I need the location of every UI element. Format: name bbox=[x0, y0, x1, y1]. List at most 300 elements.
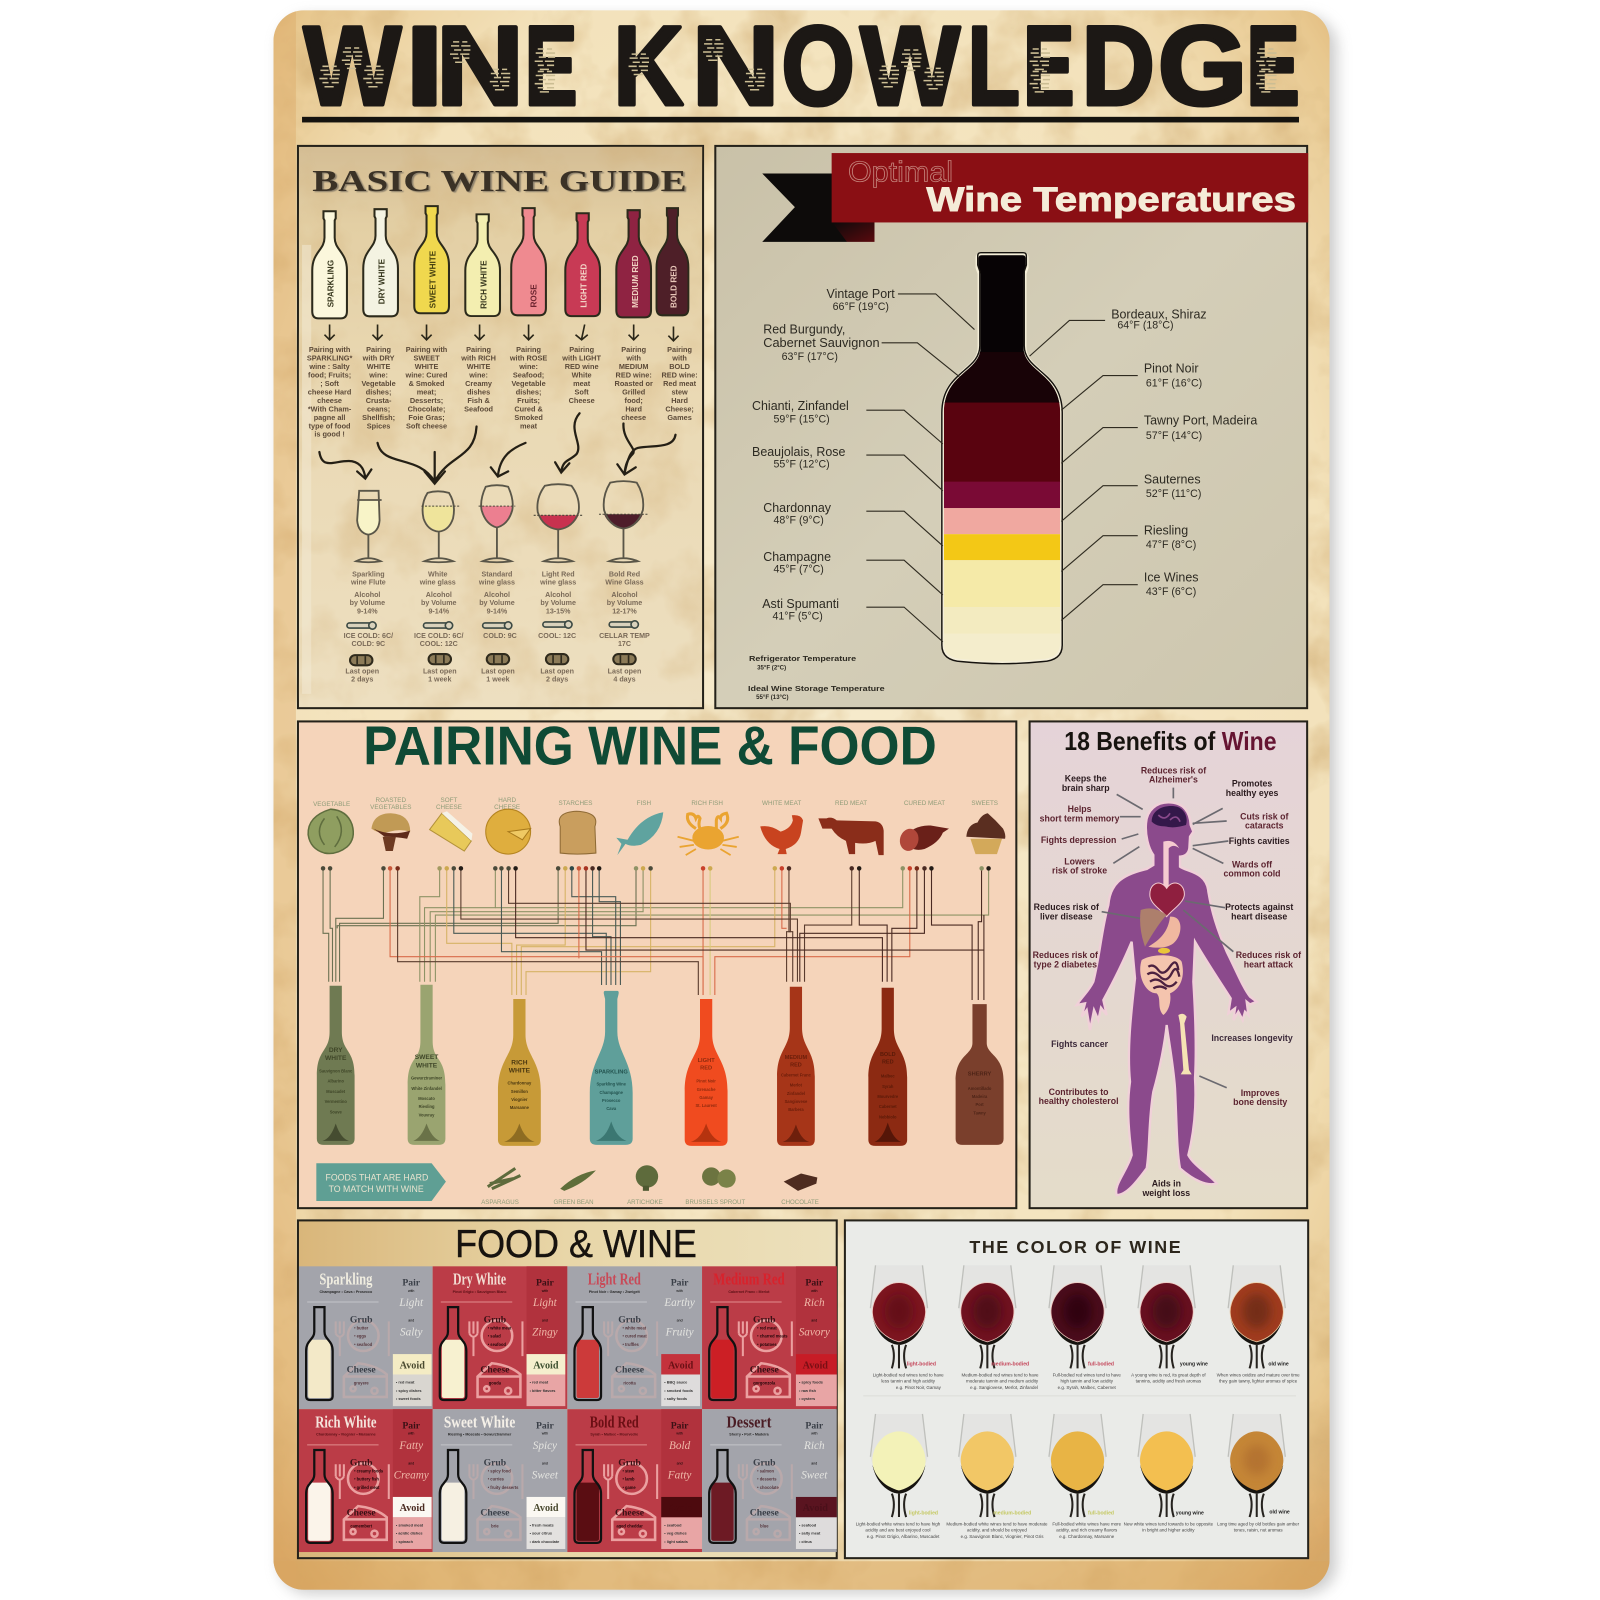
white wine captions: acidity, and rich creamy flavors bbox=[1056, 1528, 1118, 1533]
title: D bbox=[1082, 3, 1155, 129]
red wine captions: e.g. Syrah, Malbec, Cabernet bbox=[1058, 1385, 1117, 1390]
card: sparkling: gruyere bbox=[354, 1381, 369, 1386]
pairing text columns: Shellfish; bbox=[362, 413, 395, 422]
glass descriptions: Alcohol bbox=[426, 591, 452, 599]
wine bottle: dry white: Soave bbox=[330, 1109, 342, 1114]
pairing text columns: Vegetable bbox=[511, 379, 546, 388]
card: sweet white: • sour citrus bbox=[530, 1531, 552, 1536]
wine type bottles: ROSE bbox=[530, 284, 539, 307]
card: medium red: Medium Red bbox=[713, 1270, 785, 1289]
pairing text columns: Cheese; bbox=[665, 404, 694, 413]
benefit labels: heart attack bbox=[1244, 959, 1293, 969]
card: sparkling: Cheese bbox=[347, 1364, 376, 1375]
white wine captions: medium-bodied bbox=[993, 1510, 1031, 1516]
wine bottle: dry white: Sauvignon Blanc bbox=[319, 1068, 353, 1073]
card: rich white: • spinach bbox=[396, 1539, 414, 1544]
card: sparkling: Light bbox=[398, 1297, 424, 1309]
card: bold red bbox=[567, 1409, 702, 1552]
wine bottle: sweet white: Riesling bbox=[419, 1104, 435, 1109]
wine bottle: rich white: RICH bbox=[511, 1059, 528, 1066]
title: K bbox=[614, 3, 683, 129]
title: N bbox=[692, 3, 779, 129]
food labels: HARD bbox=[498, 797, 517, 804]
temperature labels: Beaujolais, Rose bbox=[752, 445, 845, 459]
card: light red: with bbox=[676, 1289, 683, 1293]
temperature labels: Sauternes bbox=[1144, 473, 1201, 487]
title: W bbox=[860, 3, 960, 129]
pairing text columns: RED wine: bbox=[616, 370, 652, 379]
pairing text columns: dishes; bbox=[516, 387, 541, 396]
wine bottle: bold red: Nebbiolo bbox=[879, 1114, 897, 1119]
white wine captions: Medium-bodied white wines tend to have moderate bbox=[946, 1522, 1048, 1527]
white wine captions: Long time aged by old bottles gain amber bbox=[1217, 1522, 1300, 1527]
red wine captions: full-bodied bbox=[1088, 1361, 1114, 1367]
card: sweet white: Avoid bbox=[533, 1503, 559, 1514]
temperature labels: Vintage Port bbox=[827, 287, 895, 301]
pairing text columns: dishes; bbox=[366, 387, 391, 396]
card: sparkling: • butter bbox=[354, 1326, 369, 1331]
pairing text columns: with bbox=[625, 354, 642, 363]
thermometer icons bbox=[347, 621, 638, 629]
glass descriptions: wine Flute bbox=[350, 579, 386, 587]
card: light red: Pinot Noir • Gamay • Zweigelt bbox=[589, 1290, 641, 1294]
wine bottle: rich white: Marsanne bbox=[510, 1105, 530, 1110]
parchment sign background bbox=[273, 10, 1330, 1590]
wine bottle: sparkling: Prosecco bbox=[602, 1098, 621, 1103]
wine bottle: light red: Pinot Noir bbox=[696, 1079, 716, 1084]
glass descriptions: Alcohol bbox=[611, 591, 638, 599]
icon: bread bbox=[559, 811, 596, 854]
card: dessert: Sherry • Port • Madeira bbox=[729, 1433, 770, 1437]
pairing text columns: Cured & bbox=[514, 404, 544, 413]
card: medium red: Pair bbox=[805, 1278, 824, 1289]
wine bottle: medium red: Barbera bbox=[788, 1107, 804, 1112]
card: dessert: • desserts bbox=[757, 1477, 777, 1482]
card: dry white: Grub bbox=[484, 1314, 506, 1325]
pairing text columns: wine: bbox=[468, 370, 488, 379]
benefit labels: risk of stroke bbox=[1052, 865, 1107, 875]
pairing text columns: ; Soft bbox=[320, 379, 340, 388]
card: sweet white: • spicy food bbox=[488, 1468, 511, 1473]
wine bottle: sweet white: WHITE bbox=[416, 1062, 438, 1069]
pairing text columns: Fish & bbox=[467, 396, 490, 405]
red wine captions: light-bodied bbox=[907, 1361, 936, 1367]
benefit labels: Reduces risk of bbox=[1034, 902, 1099, 912]
title: I bbox=[406, 3, 443, 129]
card: dry white: Cheese bbox=[480, 1364, 510, 1375]
red wine captions: Medium-bodied red wines tend to have bbox=[961, 1373, 1039, 1378]
benefit labels: Increases longevity bbox=[1211, 1033, 1293, 1043]
red wine captions: high tannin and low acidity bbox=[1061, 1379, 1114, 1384]
glass descriptions: Sparkling bbox=[352, 571, 385, 579]
storage temperature notes: Ideal Wine Storage Temperature bbox=[748, 684, 885, 693]
pairing text columns: Grilled bbox=[622, 387, 645, 396]
glass descriptions: 12-17% bbox=[612, 607, 637, 615]
card: dessert: • salmon bbox=[757, 1468, 774, 1473]
card: rich white: • buttery fish bbox=[354, 1477, 379, 1482]
pairing text columns: BOLD bbox=[669, 362, 690, 371]
card: medium red: Grub bbox=[753, 1314, 776, 1325]
card: sparkling: and bbox=[408, 1318, 414, 1322]
hard foods labels: BRUSSELS SPROUT bbox=[685, 1199, 745, 1206]
glass descriptions bbox=[344, 571, 650, 684]
glass descriptions: 9-14% bbox=[357, 607, 378, 615]
title: L bbox=[968, 3, 1020, 129]
white wine captions: acidity and are best enjoyed cool bbox=[865, 1528, 931, 1533]
pairing text columns: Desserts; bbox=[410, 396, 443, 405]
glass descriptions: 4 days bbox=[613, 676, 636, 684]
card: medium red: and bbox=[811, 1318, 817, 1322]
temperature labels: 63°F (17°C) bbox=[782, 351, 838, 363]
glass descriptions: COOL: 12C bbox=[538, 632, 576, 640]
benefit labels: Reduces risk of bbox=[1236, 950, 1301, 960]
temperature labels: Cabernet Sauvignon bbox=[763, 336, 880, 350]
card: light red: Fruity bbox=[665, 1327, 694, 1339]
card: sparkling: Avoid bbox=[400, 1360, 425, 1371]
benefit labels: Reduces risk of bbox=[1033, 950, 1098, 960]
card: light red: Grub bbox=[618, 1314, 641, 1325]
glass descriptions: by Volume bbox=[421, 599, 457, 607]
pairing text columns: Pairing bbox=[667, 345, 692, 354]
wine bottle: sherry bbox=[956, 1004, 1004, 1145]
white wine captions: in bright and higher acidity bbox=[1142, 1528, 1195, 1533]
glass descriptions: ICE COLD: 6C/ bbox=[414, 632, 464, 640]
benefit labels: Improves bbox=[1241, 1088, 1280, 1098]
card: bold red: Fatty bbox=[667, 1470, 691, 1482]
wine bottle: medium red: Sangiovese bbox=[785, 1099, 808, 1104]
card: light red: Cheese bbox=[615, 1364, 645, 1375]
card: bold red: • lamb bbox=[622, 1477, 635, 1482]
temperature labels: Tawny Port, Madeira bbox=[1144, 413, 1257, 427]
card: rich white: • grilled meat bbox=[354, 1485, 380, 1490]
glass descriptions: Last open bbox=[481, 667, 515, 675]
card: light red: and bbox=[677, 1318, 683, 1322]
pairing text columns: Pairing bbox=[466, 345, 491, 354]
glass descriptions: Bold Red bbox=[609, 571, 640, 579]
glass descriptions: by Volume bbox=[350, 599, 385, 607]
food labels: SOFT bbox=[441, 797, 458, 804]
pairing text columns: pagne all bbox=[314, 413, 345, 422]
pairing text columns: RED wine: bbox=[661, 370, 698, 379]
card: dessert: • seafood bbox=[799, 1523, 817, 1528]
pairing text columns: meat bbox=[520, 421, 538, 430]
food labels: RED MEAT bbox=[835, 800, 867, 807]
heading: 18 benefits: 18 Benefits of Wine bbox=[1064, 726, 1277, 756]
pairing text columns: Seafood bbox=[464, 404, 493, 413]
card: dessert: with bbox=[811, 1432, 817, 1436]
ribbon heading bbox=[762, 153, 1308, 242]
pairing text columns: is good ! bbox=[314, 430, 345, 439]
pairing text columns: meat bbox=[573, 379, 591, 388]
pairing text columns: Pairing bbox=[621, 345, 646, 354]
white wine glasses row bbox=[870, 1414, 1285, 1517]
title: E bbox=[525, 3, 577, 129]
pairing text columns: Creamy bbox=[465, 379, 493, 388]
benefit labels: type 2 diabetes bbox=[1034, 959, 1097, 969]
temperature labels: 64°F (18°C) bbox=[1117, 320, 1174, 332]
card: light red bbox=[567, 1266, 702, 1409]
glass descriptions: 2 days bbox=[546, 676, 568, 684]
card: medium red: Savory bbox=[799, 1327, 830, 1339]
glass descriptions: 1 week bbox=[428, 676, 452, 684]
wine bottle: sweet white: Vouvray bbox=[419, 1112, 435, 1117]
red wine glasses row bbox=[870, 1265, 1285, 1368]
pairing text columns: wine: bbox=[518, 362, 538, 371]
glass descriptions: 13-15% bbox=[546, 607, 571, 615]
pairing text columns: cheese bbox=[621, 413, 646, 422]
title: W bbox=[304, 3, 401, 129]
card: dessert: • salty meat bbox=[799, 1531, 821, 1536]
card: bold red: • veg dishes bbox=[664, 1531, 687, 1536]
wine bottle: sparkling bbox=[590, 991, 633, 1145]
card: rich white: with bbox=[408, 1432, 414, 1436]
wine bottle: sherry: Tawny bbox=[973, 1110, 987, 1115]
glass descriptions: Last open bbox=[423, 667, 457, 675]
wine bottle: sweet white: White Zinfandel bbox=[411, 1086, 442, 1091]
wine bottle: light red: Grenache bbox=[697, 1087, 716, 1092]
glass descriptions: Wine Glass bbox=[605, 579, 644, 587]
glass descriptions: 17C bbox=[618, 640, 631, 648]
wine bottle: dry white: DRY bbox=[329, 1047, 343, 1054]
red wine captions: When wines oxidize and mature over time bbox=[1217, 1373, 1300, 1378]
benefit labels: Fights cancer bbox=[1051, 1039, 1109, 1049]
card: sweet white: Riesling • Moscato • Gewurztraminer bbox=[448, 1433, 512, 1437]
temperature labels: 61°F (16°C) bbox=[1146, 378, 1202, 390]
wine bottle: medium red: MEDIUM bbox=[785, 1055, 807, 1061]
card: sparkling: • red meat bbox=[396, 1380, 415, 1385]
temperature labels: 59°F (15°C) bbox=[773, 413, 830, 425]
callout: hard to match foods: TO MATCH WITH WINE bbox=[329, 1184, 424, 1194]
benefit labels: common cold bbox=[1224, 869, 1281, 879]
card: light red: Avoid bbox=[668, 1360, 694, 1371]
benefit labels: heart disease bbox=[1231, 911, 1287, 921]
pairing text columns: Hard bbox=[671, 396, 688, 405]
red wine captions: young wine bbox=[1180, 1361, 1208, 1367]
glass descriptions: Last open bbox=[608, 667, 641, 675]
card: rich white: Fatty bbox=[398, 1440, 423, 1452]
wine bottle: bold red bbox=[868, 988, 907, 1146]
wine bottle: rich white: Semillon bbox=[511, 1089, 528, 1094]
benefit labels: Reduces risk of bbox=[1141, 765, 1206, 775]
card: light red: Pair bbox=[671, 1278, 689, 1289]
card: light red: • truffles bbox=[622, 1342, 640, 1347]
wine bottle: dry white: WHITE bbox=[325, 1055, 347, 1062]
wine bottle: sweet white: SWEET bbox=[415, 1054, 438, 1061]
icon: chicken bbox=[760, 815, 803, 854]
storage temperature notes: Refrigerator Temperature bbox=[749, 654, 856, 663]
white wine captions: old wine bbox=[1269, 1509, 1290, 1515]
card: medium red: Rich bbox=[803, 1297, 825, 1309]
pairing text columns: type of food bbox=[309, 421, 351, 430]
wine bottle: dry white bbox=[317, 986, 355, 1145]
title: G bbox=[1158, 3, 1247, 129]
white wine captions: Light-bodied white wines tend to have high bbox=[856, 1522, 941, 1527]
card: dry white: Pair bbox=[536, 1278, 554, 1289]
pairing text columns: wine : Salty bbox=[308, 362, 351, 371]
glass descriptions: Light Red bbox=[542, 571, 575, 579]
pairing text columns: Fruits; bbox=[517, 396, 540, 405]
card: light red: • salty foods bbox=[664, 1396, 687, 1401]
wine bottle: sparkling: Sparkling Wine bbox=[597, 1082, 627, 1087]
card: dry white: • salad bbox=[488, 1334, 501, 1339]
food labels: FISH bbox=[637, 800, 652, 807]
icon: mushroom bbox=[371, 813, 410, 851]
pairing text columns: SWEET bbox=[413, 354, 440, 363]
pairing text columns: dishes bbox=[467, 387, 490, 396]
storage temperature notes bbox=[748, 654, 885, 701]
card: medium red: • charred meats bbox=[757, 1334, 788, 1339]
card: sweet white: Pair bbox=[536, 1421, 554, 1432]
benefit labels: Helps bbox=[1068, 804, 1092, 814]
food labels: CURED MEAT bbox=[904, 800, 945, 807]
card: dry white: Avoid bbox=[533, 1360, 559, 1371]
card: sparkling: Champagne • Cava • Prosecco bbox=[320, 1290, 373, 1294]
pairing text columns: cheese bbox=[317, 396, 342, 405]
wine bottle: sparkling: Champagne bbox=[600, 1090, 624, 1095]
wine type bottles: SPARKLING bbox=[327, 260, 336, 307]
storage temperature notes: 35°F (2°C) bbox=[757, 664, 786, 671]
pairing text columns: food; Fruits; bbox=[308, 370, 351, 379]
card: bold red: Avoid bbox=[668, 1503, 694, 1514]
card: sweet white: Sweet bbox=[532, 1470, 559, 1482]
temperature labels: 47°F (8°C) bbox=[1146, 539, 1196, 551]
hard foods labels: CHOCOLATE bbox=[781, 1199, 819, 1206]
pairing text columns: ceans; bbox=[367, 404, 390, 413]
title underline bbox=[302, 117, 1299, 122]
benefit labels: Fights cavities bbox=[1229, 836, 1290, 846]
white wine captions: e.g. Chardonnay, Marsanne bbox=[1059, 1534, 1115, 1539]
red wine captions: less tannin and high acidity bbox=[881, 1379, 936, 1384]
card: bold red: • seafood bbox=[664, 1523, 682, 1528]
food labels: VEGETABLES bbox=[370, 804, 411, 811]
temperature labels: Chianti, Zinfandel bbox=[752, 399, 849, 413]
glass descriptions: Last open bbox=[540, 667, 574, 675]
panel: pairing wine and food bbox=[298, 714, 1016, 1208]
card: dessert bbox=[702, 1409, 837, 1552]
wine bottle: medium red bbox=[777, 987, 815, 1146]
wine bottle: bold red: Malbec bbox=[881, 1074, 895, 1079]
card: sparkling: • seafood bbox=[354, 1342, 373, 1347]
white wine captions: e.g. Sauvignon Blanc, Viognier, Pinot Gris bbox=[961, 1534, 1044, 1539]
pairing text columns: Cheese bbox=[569, 396, 595, 405]
card: rich white: Chardonnay • Viognier • Marsanne bbox=[316, 1433, 376, 1437]
card: bold red: • light salads bbox=[664, 1539, 688, 1544]
pairing text columns: Crusta- bbox=[366, 396, 392, 405]
card: light red: Light Red bbox=[588, 1270, 641, 1289]
glass descriptions: Standard bbox=[481, 571, 512, 579]
pairing text columns: with bbox=[671, 354, 687, 363]
card: sweet white: • dark chocolate bbox=[530, 1539, 560, 1544]
red wine captions: e.g. Pinot Noir, Gamay bbox=[896, 1385, 942, 1390]
card: medium red: with bbox=[811, 1289, 817, 1293]
card: dry white: and bbox=[542, 1318, 548, 1322]
food connection dots bbox=[321, 866, 991, 871]
pairing text columns: with LIGHT bbox=[561, 354, 601, 363]
wine bottle: light red: Gamay bbox=[699, 1095, 714, 1100]
benefit labels: Lowers bbox=[1064, 856, 1095, 866]
card: sweet white: Grub bbox=[484, 1457, 506, 1468]
glass descriptions: 2 days bbox=[351, 676, 373, 684]
panel: 18 benefits of wine bbox=[1030, 721, 1307, 1208]
card: medium red: gorgonzola bbox=[753, 1381, 776, 1386]
card: dry white: • red meat bbox=[530, 1380, 549, 1385]
card: sweet white: Sweet White bbox=[444, 1413, 515, 1432]
pairing text columns: WHITE bbox=[415, 362, 438, 371]
wine bottle: dry white: Albarino bbox=[327, 1079, 344, 1084]
heading: food and wine: FOOD & WINE bbox=[455, 1223, 697, 1266]
wine bottle: rich white: Viognier bbox=[511, 1097, 528, 1102]
food labels: RICH FISH bbox=[691, 800, 723, 807]
card: sparkling: Salty bbox=[400, 1327, 422, 1339]
white wine captions bbox=[856, 1509, 1300, 1539]
wine bottle: medium red: Zinfandel bbox=[787, 1091, 805, 1096]
benefit labels: Cuts risk of bbox=[1240, 811, 1288, 821]
icon: cow bbox=[818, 818, 884, 855]
card: dessert: blue bbox=[760, 1524, 769, 1529]
glass descriptions: COOL: 12C bbox=[420, 640, 458, 648]
benefit labels: Aids in bbox=[1152, 1179, 1181, 1189]
benefit labels: Promotes bbox=[1232, 779, 1272, 789]
wine bottle: sweet white bbox=[408, 985, 445, 1145]
card: sparkling: Sparkling bbox=[319, 1270, 372, 1289]
red wine captions: they gain tawny, lighter aromas of spice bbox=[1219, 1379, 1298, 1384]
wine bottle: sherry: Port bbox=[976, 1102, 984, 1107]
pairing text columns: meat; bbox=[417, 387, 436, 396]
ribbon heading: Wine Temperatures bbox=[927, 181, 1296, 219]
wine type bottles: BOLD RED bbox=[670, 265, 679, 308]
red wine captions: old wine bbox=[1268, 1361, 1289, 1367]
card: dry white: Dry White bbox=[453, 1270, 506, 1289]
card: sparkling: • eggs bbox=[354, 1334, 367, 1339]
wine type bottles: LIGHT RED bbox=[580, 264, 589, 308]
temperature labels: 55°F (12°C) bbox=[773, 458, 830, 470]
card: rich white: camembert bbox=[350, 1524, 373, 1529]
food labels: WHITE MEAT bbox=[762, 800, 801, 807]
card: dessert: Pair bbox=[805, 1421, 824, 1432]
wine bottle: bold red: RED bbox=[882, 1059, 894, 1065]
benefit labels: brain sharp bbox=[1062, 783, 1110, 793]
pairing text columns: Pairing bbox=[569, 345, 594, 354]
card: sparkling: • sweet foods bbox=[396, 1396, 421, 1401]
white wine captions: tones, raisin, nut aromas bbox=[1234, 1528, 1283, 1533]
sign shadow bbox=[280, 16, 1337, 1594]
benefit labels bbox=[1033, 765, 1301, 1198]
temperature bottle bbox=[939, 250, 1066, 664]
pairing text columns: stew bbox=[671, 387, 688, 396]
card: medium red: Cheese bbox=[750, 1364, 780, 1375]
card: bold red: with bbox=[676, 1432, 683, 1436]
card: medium red: Avoid bbox=[803, 1360, 828, 1371]
glass descriptions: by Volume bbox=[540, 599, 576, 607]
heading: basic wine guide: BASIC WINE GUIDE bbox=[312, 164, 687, 198]
callout: hard to match foods bbox=[316, 1163, 446, 1201]
card: light red: Earthy bbox=[663, 1297, 695, 1309]
wine bottle: dry white: Muscadet bbox=[326, 1089, 346, 1094]
wine bottle: sherry: Madeira bbox=[972, 1094, 988, 1099]
card: dry white: Light bbox=[532, 1297, 558, 1309]
benefit labels: Fights depression bbox=[1041, 835, 1116, 845]
pairing text columns: & Smoked bbox=[409, 379, 444, 388]
card: dry white: Pinot Grigio • Sauvignon Blanc bbox=[453, 1290, 507, 1294]
title: N bbox=[436, 3, 524, 129]
wine bottle: medium red: RED bbox=[790, 1062, 802, 1068]
card: sparkling: • spicy dishes bbox=[396, 1388, 422, 1393]
card: sweet white: with bbox=[542, 1432, 548, 1436]
red wine captions bbox=[873, 1361, 1300, 1390]
temperature labels: Chardonnay bbox=[763, 501, 832, 515]
temperature labels: 48°F (9°C) bbox=[773, 514, 824, 526]
wine glasses bbox=[356, 481, 649, 562]
